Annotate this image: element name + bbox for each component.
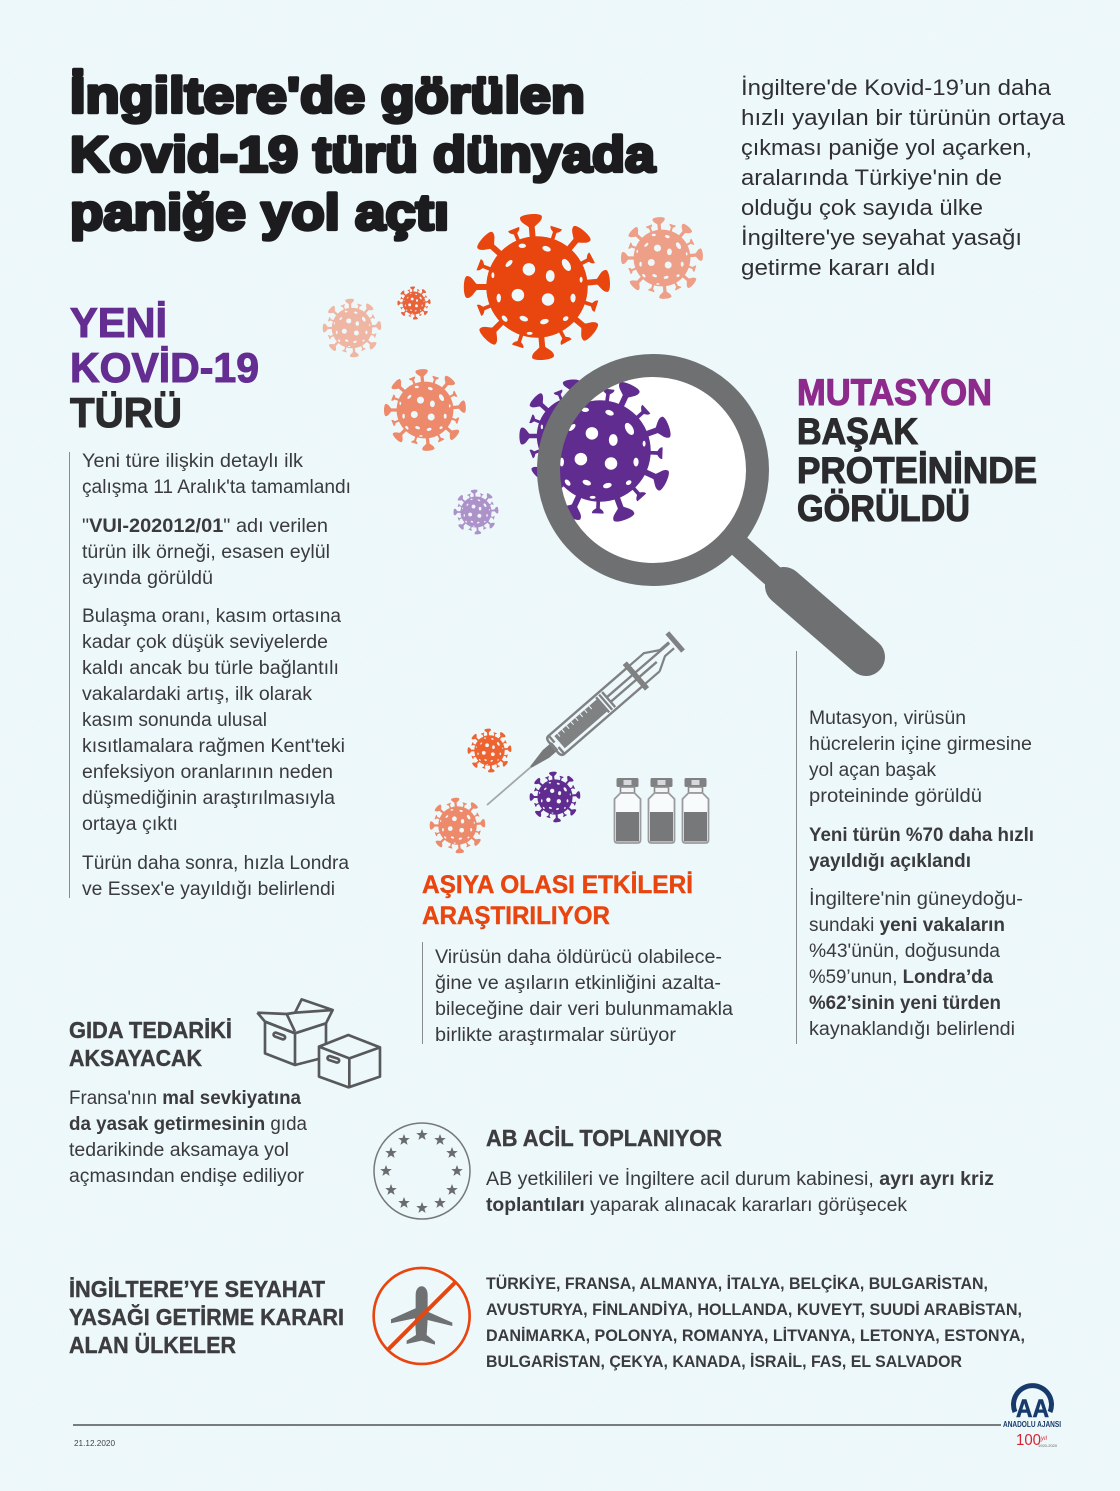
heading: yeni kovid-19 türü: KOVİD-19 [70,344,259,391]
logo: Anadolu Ajansı: 100 [1016,1432,1041,1449]
left text block: kaldı ancak bu türle bağlantılı [82,658,339,679]
virus: pale left [323,298,382,358]
left text block: ve Essex'e yayıldığı belirlendi [82,879,335,900]
vaccine text block [422,942,733,1046]
logo: Anadolu Ajansı: ANADOLU AJANSI [1003,1420,1061,1429]
right text block: Yeni türün %70 daha hızlı [809,825,1034,846]
virus: vaccine salmon [430,797,486,854]
left text block [70,451,351,900]
right text block: yol açan başak [809,760,936,781]
heading: mutasyon: GÖRÜLDÜ [797,488,970,529]
title: Kovid-19 türü dünyada [70,126,656,182]
intro text: getirme kararı aldı [741,255,936,280]
virus: pink top right [621,217,703,299]
right text block: İngiltere'nin güneydoğu- [809,889,1023,910]
virus cluster [323,213,703,535]
country list: TÜRKİYE, FRANSA, ALMANYA, İTALYA, BELÇİKA, BULGARİSTAN, [486,1274,988,1293]
vaccine text block: Virüsün daha öldürücü olabilece- [435,947,722,968]
right text block: %59’unun, Londra’da [809,967,993,988]
heading: travel ban: YASAĞI GETİRME KARARI [69,1303,344,1330]
virus: light purple [454,489,499,535]
food supply text: tedarikinde aksamaya yol [69,1140,289,1161]
footer rule [73,1424,1001,1426]
right text block: Mutasyon, virüsün [809,708,966,729]
heading: gıda tedariki: GIDA TEDARİKİ [69,1017,232,1043]
right text block: yayıldığı açıklandı [809,851,971,872]
left text block: türün ilk örneği, esasen eylül [82,542,330,563]
intro text: İngiltere'de Kovid-19’un daha [741,75,1052,100]
country list [486,1274,1025,1371]
right text block: hücrelerin içine girmesine [809,734,1032,755]
virus: large orange [464,213,611,361]
food supply text [69,1088,307,1187]
right text block: kaynaklandığı belirlendi [809,1019,1015,1040]
EU text: toplantıları yaparak alınacak kararları görüşecek [486,1195,908,1216]
logo: Anadolu Ajansı [1003,1386,1061,1449]
logo: Anadolu Ajansı: 1920-2020 [1038,1443,1058,1448]
logo: Anadolu Ajansı: AA [1016,1395,1049,1423]
heading: gıda tedariki [69,1017,232,1071]
EU text [486,1169,994,1216]
right text block: %43'ünün, doğusunda [809,941,1000,962]
heading: travel ban: ALAN ÜLKELER [69,1332,236,1358]
right text block: proteininde görüldü [809,786,982,807]
left text block: enfeksiyon oranlarının neden [82,762,333,783]
icon: EU stars [374,1123,470,1219]
heading: mutasyon: MUTASYON [797,372,992,413]
left text block: çalışma 11 Aralık'ta tamamlandı [82,477,351,498]
virus: vaccine purple [530,771,581,823]
icon: syringe [476,629,686,818]
heading: yeni kovid-19 türü [70,299,259,436]
left text block: Yeni türe ilişkin detaylı ilk [82,451,304,472]
left text block: "VUI-202012/01 " adı verilen [82,516,328,537]
left text block: Bulaşma oranı, kasım ortasına [82,606,341,627]
left text block: ayında görüldü [82,568,213,589]
country list: DANİMARKA, POLONYA, ROMANYA, LİTVANYA, LETONYA, ESTONYA, [486,1326,1025,1345]
country list: AVUSTURYA, FİNLANDİYA, HOLLANDA, KUVEYT, SUUDİ ARABİSTAN, [486,1300,1022,1319]
food supply text: da yasak getirmesinin gıda [69,1114,307,1135]
intro text: hızlı yayılan bir türünün ortaya [741,105,1066,130]
left text block: ortaya çıktı [82,814,178,835]
intro text: İngiltere'ye seyahat yasağı [741,225,1022,250]
heading: aşıya olası etkileri: ARAŞTIRILIYOR [422,902,610,930]
left text block: düşmediğinin araştırılmasıyla [82,788,335,809]
heading: gıda tedariki: AKSAYACAK [69,1045,202,1071]
icon: boxes [257,999,380,1087]
title: İngiltere'de görülen [70,68,585,124]
virus: vaccine orange [468,728,512,773]
food supply text: Fransa'nın mal sevkiyatına [69,1088,301,1109]
heading: aşıya olası etkileri [422,871,693,930]
vaccine text block: ğine ve aşıların etkinliğini azalta- [435,973,721,994]
title: paniğe yol açtı [70,184,449,240]
right text block: sundaki yeni vakaların [809,915,1005,936]
country list: BULGARİSTAN, ÇEKYA, KANADA, İSRAİL, FAS, EL SALVADOR [486,1352,962,1371]
left text block: kısıtlamalara rağmen Kent'teki [82,736,345,757]
heading: ab acil toplanıyor: AB ACİL TOPLANIYOR [486,1125,722,1151]
EU text: AB yetkilileri ve İngiltere acil durum kabinesi, ayrı ayrı kriz [486,1169,994,1190]
right text block: %62’sinin yeni türden [809,993,1001,1014]
intro text [741,75,1066,280]
heading: mutasyon [797,372,1037,529]
virus: salmon [384,369,466,451]
left text block: kadar çok düşük seviyelerde [82,632,328,653]
icon: no flights [374,1268,470,1364]
heading: yeni kovid-19 türü: TÜRÜ [70,389,182,436]
heading: travel ban: İNGİLTERE’YE SEYAHAT [69,1276,325,1302]
heading: yeni kovid-19 türü: YENİ [70,299,167,346]
heading: mutasyon: BAŞAK [797,411,918,452]
left text block: Türün daha sonra, hızla Londra [82,853,349,874]
intro text: çıkması paniğe yol açarken, [741,135,1032,160]
intro text: olduğu çok sayıda ülke [741,195,983,220]
left text block: kasım sonunda ulusal [82,710,267,731]
title [70,68,656,240]
logo: Anadolu Ajansı: yıl [1040,1436,1048,1442]
virus: small orange [397,286,431,320]
intro text: aralarında Türkiye'nin de [741,165,1002,190]
vaccine text block: birlikte araştırmalar sürüyor [435,1025,677,1046]
heading: aşıya olası etkileri: AŞIYA OLASI ETKİLERİ [422,871,693,899]
date: 21.12.2020 [74,1438,115,1448]
virus: magnified purple [560,382,671,522]
vaccine text block: bileceğine dair veri bulunmamakla [435,999,733,1020]
heading: travel ban [69,1276,344,1358]
virus: purple behind lens [519,379,633,493]
food supply text: açmasından endişe ediliyor [69,1166,305,1187]
icon: vaccine vials [614,778,708,843]
magnifier [500,350,866,657]
left text block: vakalardaki artış, ilk olarak [82,684,313,705]
heading: mutasyon: PROTEİNİNDE [797,450,1037,491]
right text block [796,651,1034,1044]
